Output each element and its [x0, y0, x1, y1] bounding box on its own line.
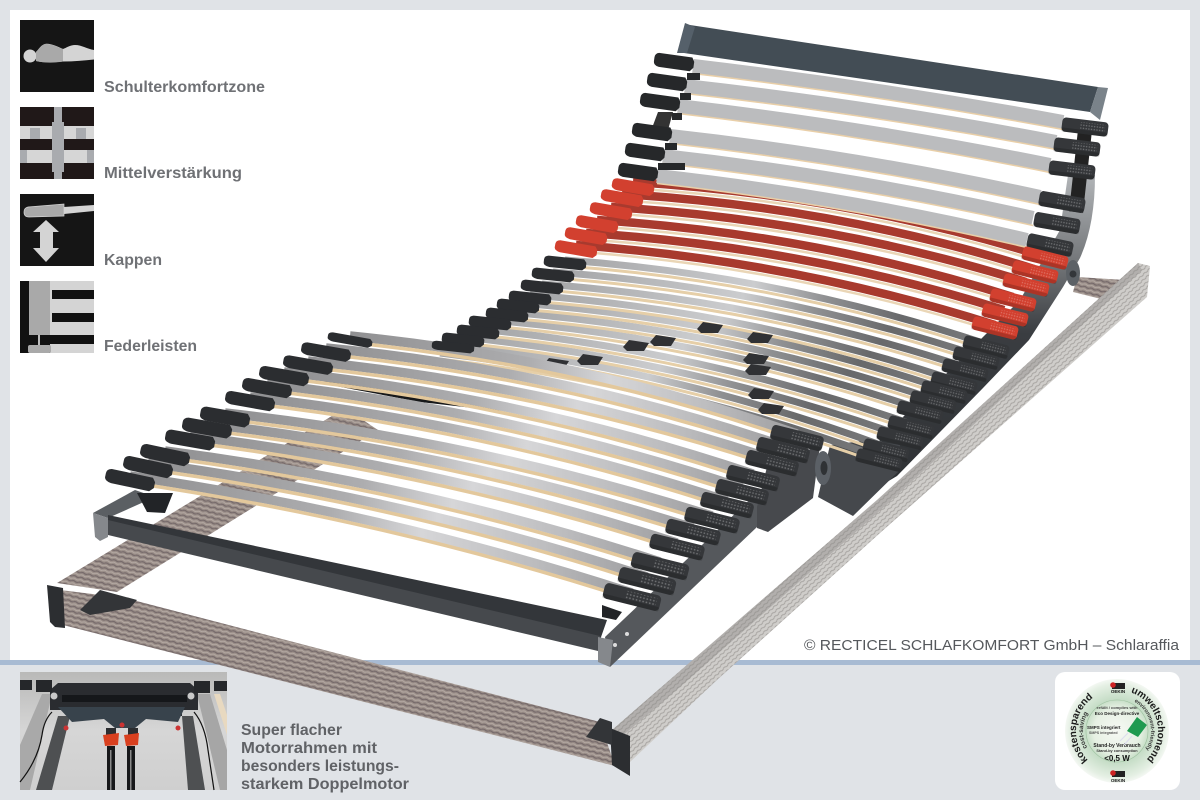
motor housing in photo — [50, 683, 198, 728]
energy seal badge — [1055, 672, 1180, 790]
seal logos: OEKIN — [1111, 778, 1125, 783]
blue divider band — [0, 660, 1200, 665]
motor photo — [20, 672, 227, 790]
label: Schulterkomfortzone: Schulterkomfortzone — [104, 79, 265, 96]
centre connector pads — [543, 322, 784, 414]
right slat clips — [602, 117, 1109, 612]
feature icons with labels — [20, 20, 265, 355]
outer woven frame — [47, 263, 1150, 776]
seal logos — [1110, 682, 1125, 783]
seal ring text right small: environment-friendly — [1134, 700, 1155, 751]
motor housing — [757, 440, 900, 532]
seal centre text — [1087, 705, 1141, 763]
seal centre text: SMPS integrated — [1089, 731, 1118, 735]
motor caption: besonders leistungs- — [241, 758, 399, 775]
back frame rail — [1073, 277, 1125, 300]
seal ring text right: umweltschonend — [1132, 688, 1166, 764]
right pedal — [586, 718, 612, 745]
pivot joints — [815, 260, 1080, 485]
inner foot bar — [93, 490, 760, 667]
icon: spring slats — [20, 281, 94, 353]
icon: centre reinforcement — [20, 107, 94, 179]
red left clips — [554, 177, 655, 259]
motor caption: starkem Doppelmotor — [241, 776, 409, 793]
head slat brackets — [658, 73, 700, 170]
head left clips — [617, 52, 695, 182]
front frame rail — [60, 590, 615, 766]
left slat clips — [104, 255, 587, 492]
white product panel — [10, 10, 1190, 660]
rails in photo — [36, 716, 205, 790]
icon: shoulder comfort zone — [20, 20, 94, 92]
middle section slats — [440, 260, 986, 463]
slatted bed frame — [93, 23, 1109, 667]
red shoulder zone slats — [576, 182, 1043, 332]
motor caption: Motorrahmen mit — [241, 740, 377, 757]
copyright line: © RECTICEL SCHLAFKOMFORT GmbH – Schlaraffia — [804, 637, 1180, 654]
icon: caps adjustable — [20, 194, 94, 266]
seal centre text: SMPS integriert — [1087, 725, 1121, 730]
side slats in photo — [20, 694, 227, 790]
seal ring text left: kostensparend — [1070, 692, 1092, 764]
motor caption: Super flacher — [241, 722, 342, 739]
seal centre text: erfüllt / complies with — [1097, 705, 1138, 710]
red couplers in photo — [64, 722, 180, 790]
cables in photo — [20, 712, 214, 790]
label: Federleisten: Federleisten — [104, 338, 197, 355]
seal centre text: Stand-by Verbrauch — [1093, 743, 1141, 749]
right frame rail — [612, 263, 1150, 762]
curved side rail — [652, 112, 1095, 492]
head bar — [677, 23, 1108, 120]
left end cap — [47, 585, 65, 628]
seal logos: OEKIN — [1111, 689, 1125, 694]
seal centre text: <0,5 W — [1104, 754, 1130, 763]
label: Mittelverstärkung: Mittelverstärkung — [104, 165, 242, 182]
label: Kappen: Kappen — [104, 252, 162, 269]
left pedal — [80, 590, 137, 615]
clip heads in photo — [20, 680, 227, 693]
seal centre text: Stand-by consumption — [1096, 749, 1138, 753]
motor caption — [241, 722, 409, 793]
right end cap — [610, 728, 630, 776]
seal centre text: Eco Design-directive — [1095, 711, 1140, 716]
red right clips — [971, 246, 1069, 340]
seal ring text left small: cost-saving — [1079, 712, 1088, 748]
bracket feet — [137, 493, 622, 620]
head section slats — [657, 66, 1063, 248]
icon: green plug — [1120, 717, 1147, 745]
dark gap under foot section — [322, 376, 507, 411]
left frame rail — [57, 408, 378, 592]
foot section slats — [130, 336, 797, 600]
